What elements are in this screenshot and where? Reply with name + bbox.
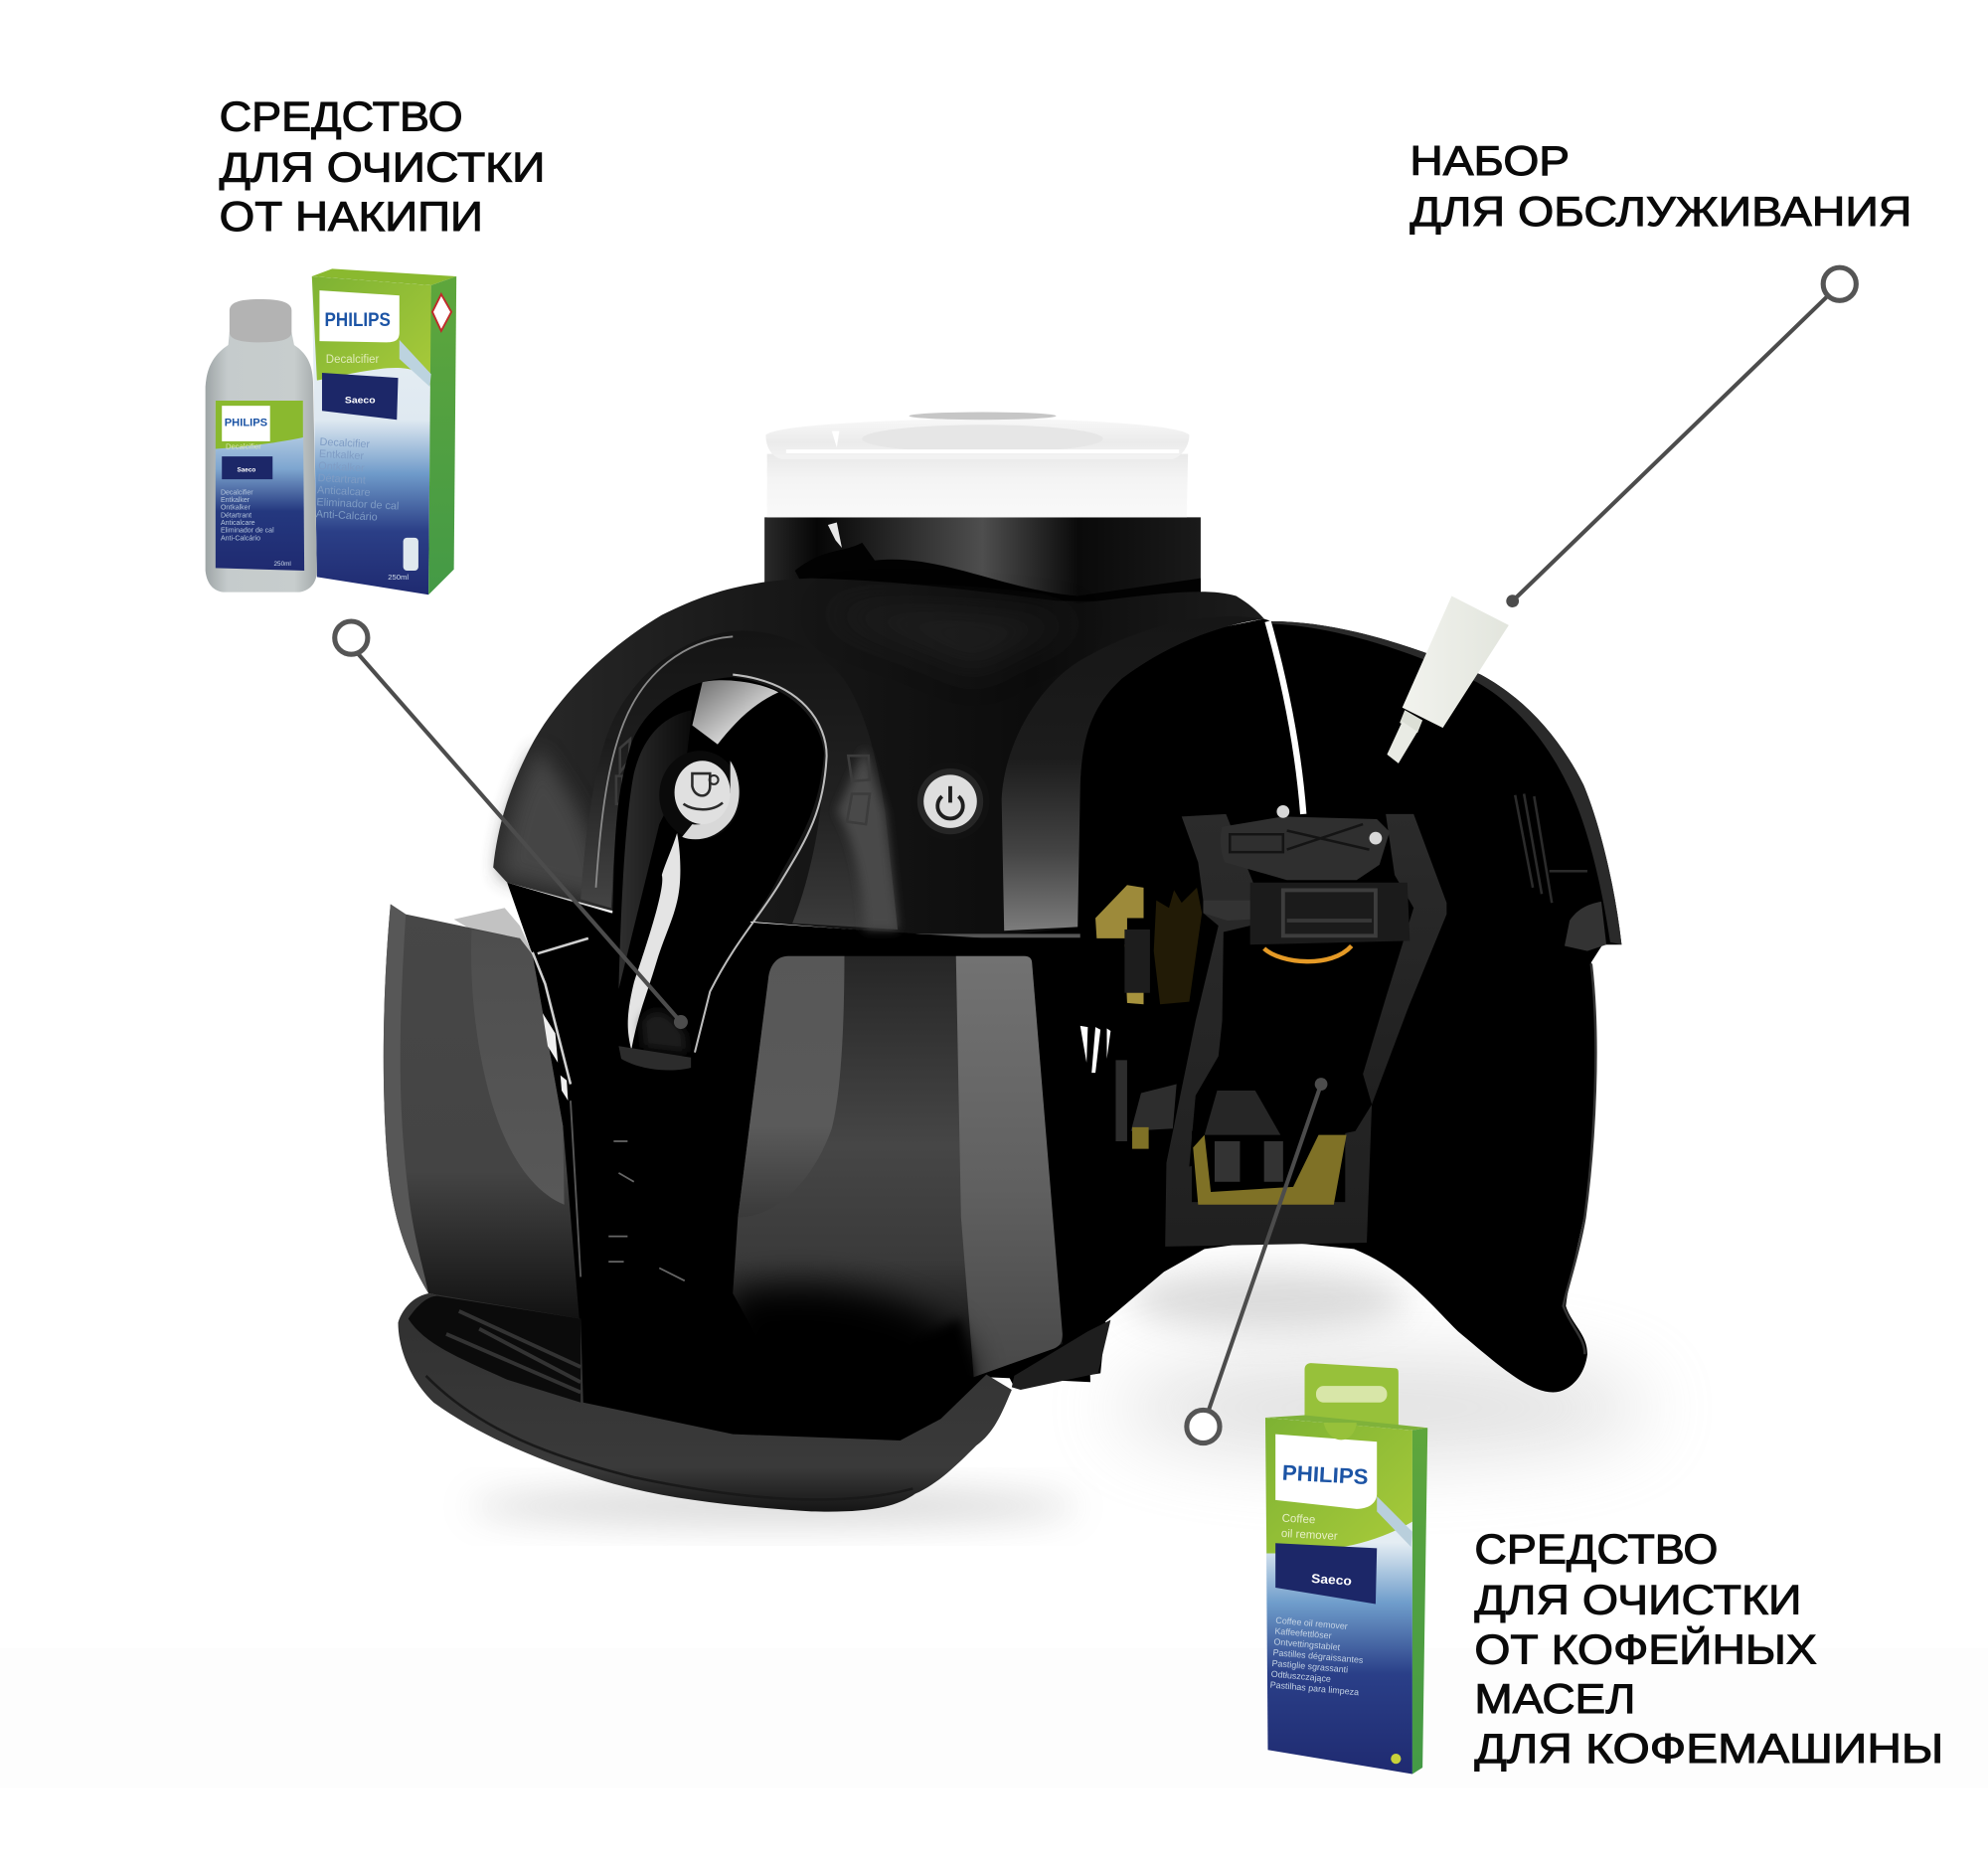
- product: decalcifier bottle: Saeco: [238, 466, 255, 473]
- product: decalcifier bottle: Ontkalker: [221, 505, 251, 512]
- product: decalcifier bottle: Eliminador de cal: [221, 528, 274, 535]
- product: decalcifier box: Decalcifier: [319, 436, 371, 450]
- upper body dome: [493, 579, 1264, 935]
- heading: coffee oil remover: [1474, 1526, 1943, 1772]
- body right face: [1002, 616, 1264, 931]
- orange ring: [1264, 946, 1352, 961]
- frame: [1165, 814, 1372, 1247]
- product: coffee oil remover box: Odtłuszczające: [1270, 1669, 1331, 1684]
- heading: maintenance kit: НАБОР: [1409, 137, 1570, 184]
- brew group: [1080, 805, 1446, 1247]
- product: coffee oil remover box: Pastilhas para limpeza: [1269, 1679, 1359, 1697]
- product: decalcifier box: Anticalcare: [317, 484, 371, 499]
- coffee machine: [384, 413, 1621, 1512]
- product: coffee oil remover box: PHILIPS: [1281, 1460, 1369, 1489]
- product: decalcifier box: Détartrant: [317, 472, 366, 487]
- product: decalcifier box: [312, 268, 456, 594]
- callout: descaler leader line: [335, 621, 688, 1029]
- heading: descaler: ОТ НАКИПИ: [220, 193, 483, 240]
- product: coffee oil remover box: Pastilles dégraissantes: [1272, 1647, 1364, 1665]
- product: coffee oil remover box: Coffee oil remover: [1275, 1615, 1348, 1631]
- maintenance grease tube: [1387, 595, 1509, 763]
- heading: coffee oil remover: СРЕДСТВО: [1474, 1526, 1718, 1573]
- heading: coffee oil remover: ДЛЯ ОЧИСТКИ: [1474, 1577, 1802, 1623]
- product: decalcifier box: 250ml: [388, 573, 409, 582]
- white ticks: [1080, 1026, 1110, 1073]
- crossbar: [1250, 883, 1409, 944]
- product: decalcifier bottle: [206, 299, 317, 593]
- heading: coffee oil remover: ОТ КОФЕЙНЫХ: [1474, 1624, 1817, 1672]
- heading: coffee oil remover: ДЛЯ КОФЕМАШИНЫ: [1474, 1725, 1943, 1772]
- product: decalcifier box: Ontkalker: [318, 460, 365, 474]
- product: decalcifier bottle: Anticalcare: [221, 520, 255, 527]
- arch around dispenser: [580, 630, 898, 930]
- left open door: [384, 904, 588, 1335]
- callout: maintenance kit leader line: [1506, 267, 1856, 607]
- glossy coffee dispenser: [608, 675, 827, 1071]
- pump and screws: [1221, 816, 1390, 880]
- product: coffee oil remover box: Saeco: [1311, 1571, 1353, 1589]
- product: decalcifier box: Eliminador de cal: [316, 496, 400, 513]
- heading: descaler: ДЛЯ ОЧИСТКИ: [220, 143, 545, 190]
- product: decalcifier bottle: Anti-Calcário: [221, 535, 260, 542]
- open side door and interior: [888, 618, 1621, 1393]
- lower front panel: [710, 956, 1063, 1438]
- product: decalcifier bottle: 250ml: [274, 561, 291, 568]
- heading: coffee oil remover: МАСЕЛ: [1474, 1675, 1635, 1722]
- heading: descaler: [220, 92, 545, 240]
- product: decalcifier bottle: Decalcifier: [226, 442, 261, 451]
- product: decalcifier box: Decalcifier: [326, 352, 379, 366]
- heading: descaler: СРЕДСТВО: [220, 92, 463, 139]
- product: decalcifier box: Anti-Calcário: [315, 508, 378, 524]
- lower left parts: [1115, 1060, 1177, 1141]
- product: decalcifier box: Entkalker: [319, 448, 365, 462]
- product: decalcifier bottle: Détartrant: [221, 512, 251, 519]
- product: coffee oil remover box: oil remover: [1281, 1528, 1338, 1543]
- product: coffee oil remover box: Ontvettingstablet: [1273, 1636, 1341, 1652]
- product: decalcifier bottle: Entkalker: [221, 497, 250, 504]
- water tank: white band and clear lid: [765, 413, 1189, 517]
- water tank: dark base: [764, 517, 1201, 611]
- drip tray: [399, 1293, 1012, 1512]
- side slots: [616, 740, 870, 824]
- heading: maintenance kit: [1409, 137, 1911, 235]
- product: coffee oil remover box: Kaffeefettlöser: [1274, 1625, 1332, 1640]
- product: coffee oil remover box: Coffee: [1281, 1513, 1316, 1526]
- product: decalcifier bottle: Decalcifier: [221, 489, 253, 496]
- callout: oil remover leader line: [1187, 1078, 1327, 1443]
- yellow parts left: [1095, 885, 1202, 1004]
- heading: maintenance kit: ДЛЯ ОБСЛУЖИВАНИЯ: [1409, 188, 1911, 235]
- center black column: [507, 883, 1090, 1443]
- product: decalcifier box: PHILIPS: [325, 310, 391, 331]
- machine rear foot: [1012, 1320, 1110, 1390]
- shadow: under machine: [469, 1270, 1648, 1524]
- product: decalcifier box: Saeco: [345, 396, 376, 407]
- icon: power button: [911, 763, 990, 841]
- product: coffee oil remover box: [1265, 1363, 1427, 1774]
- gloss details in centre column: [608, 1141, 685, 1280]
- icon: coffee button: [659, 751, 741, 839]
- yellow lower assembly: [1192, 1131, 1345, 1202]
- product: decalcifier bottle: PHILIPS: [225, 418, 267, 429]
- product: coffee oil remover box: Pastiglie sgrassanti: [1271, 1658, 1349, 1675]
